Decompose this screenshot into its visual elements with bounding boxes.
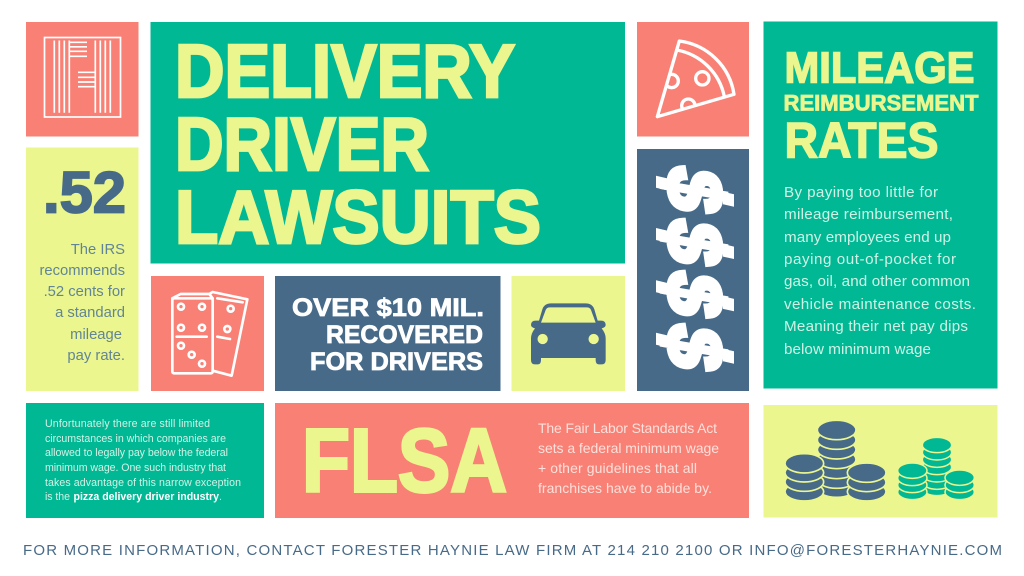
text block: FLSA explanation: sets a federal minimum wage bbox=[538, 440, 719, 456]
callout: amount recovered: FOR DRIVERS bbox=[310, 348, 483, 376]
icon: dominoes bbox=[172, 292, 247, 376]
text block: mileage explanation: many employees end up bbox=[784, 229, 951, 246]
callout: amount recovered: RECOVERED bbox=[326, 321, 483, 349]
callout: amount recovered bbox=[292, 294, 484, 376]
panel: .52 rate bbox=[26, 148, 138, 391]
text block: exception explanation bbox=[45, 418, 241, 503]
text block: IRS recommendation: The IRS bbox=[71, 242, 125, 258]
text block: IRS recommendation: pay rate. bbox=[67, 348, 125, 364]
text block: exception explanation: Unfortunately there are still limited bbox=[45, 418, 210, 430]
heading: FLSA: FLSA bbox=[302, 412, 507, 512]
panel: dominoes bbox=[151, 276, 264, 391]
title: LAWSUITS bbox=[175, 175, 541, 259]
text block: mileage explanation: below minimum wage bbox=[784, 341, 931, 358]
panel: dollar signs bbox=[637, 149, 749, 391]
text block: exception explanation: allowed to legally pay below the federal bbox=[45, 447, 228, 459]
icon: blue coin stacks bbox=[785, 420, 886, 501]
heading: mileage reimbursement rates: MILEAGE bbox=[784, 44, 974, 92]
icon: car bbox=[531, 303, 606, 364]
heading: mileage reimbursement rates: REIMBURSEMENT bbox=[784, 91, 979, 116]
text block: mileage explanation: Meaning their net pay dips bbox=[784, 318, 968, 335]
text block: exception explanation: takes advantage of this narrow exception bbox=[45, 477, 241, 489]
icon: pizza slice bbox=[657, 41, 734, 117]
text block: FLSA explanation: + other guidelines that all bbox=[538, 460, 697, 476]
title: DRIVER bbox=[175, 102, 429, 186]
text block: mileage explanation: paying out-of-pocket for bbox=[784, 251, 956, 268]
text block: FLSA explanation: franchises have to abide by. bbox=[538, 480, 712, 496]
text block: IRS recommendation: mileage bbox=[70, 327, 122, 343]
text block: exception explanation: minimum wage. One such industry that bbox=[45, 462, 226, 474]
text block: IRS recommendation: .52 cents for bbox=[44, 284, 125, 300]
panel: pizza delivery exception bbox=[26, 403, 264, 518]
title: DELIVERY bbox=[175, 29, 515, 113]
panel: FLSA bbox=[275, 403, 749, 518]
text block: exception explanation: is the bbox=[45, 491, 70, 503]
text block: FLSA explanation: The Fair Labor Standards Act bbox=[538, 420, 717, 436]
panel: pizza bbox=[637, 22, 749, 136]
heading: mileage reimbursement rates: RATES bbox=[784, 112, 938, 168]
footer: contact information: FOR MORE INFORMATION, CONTACT FORESTER HAYNIE LAW FIRM AT 214 210 2100 OR INFO@FORESTERHAYNIE.COM bbox=[23, 542, 1002, 559]
icon: green coin stacks bbox=[898, 437, 974, 500]
icon: law firm monogram bbox=[44, 38, 120, 117]
title bbox=[175, 29, 541, 259]
text block: IRS recommendation: recommends bbox=[39, 263, 125, 279]
panel: main title bbox=[150, 22, 625, 264]
panel: car bbox=[512, 276, 625, 391]
statistic: .52: .52 bbox=[43, 160, 126, 226]
text block: FLSA explanation bbox=[538, 420, 719, 496]
text block: exception explanation: circumstances in which companies are bbox=[45, 433, 226, 445]
text block: IRS recommendation bbox=[39, 242, 125, 364]
heading: mileage reimbursement rates bbox=[784, 44, 979, 168]
text block: mileage explanation bbox=[784, 184, 976, 358]
text block: mileage explanation: By paying too little for bbox=[784, 184, 938, 201]
callout: amount recovered: OVER $10 MIL. bbox=[292, 294, 484, 322]
text block: mileage explanation: vehicle maintenance costs. bbox=[784, 296, 976, 313]
text block: IRS recommendation: a standard bbox=[55, 305, 125, 321]
panel: logo bbox=[26, 22, 138, 136]
text block: mileage explanation: gas, oil, and other common bbox=[784, 273, 970, 290]
text block: exception explanation: pizza delivery driver industry bbox=[74, 491, 219, 503]
text block: mileage explanation: mileage reimbursement, bbox=[784, 206, 953, 223]
icon: rotated dollar signs: $$$$ bbox=[651, 161, 738, 377]
panel: coins bbox=[764, 405, 998, 518]
panel: over $10 million recovered bbox=[275, 276, 500, 391]
panel: mileage reimbursement rates bbox=[764, 22, 998, 388]
text block: exception explanation: . bbox=[219, 491, 222, 503]
